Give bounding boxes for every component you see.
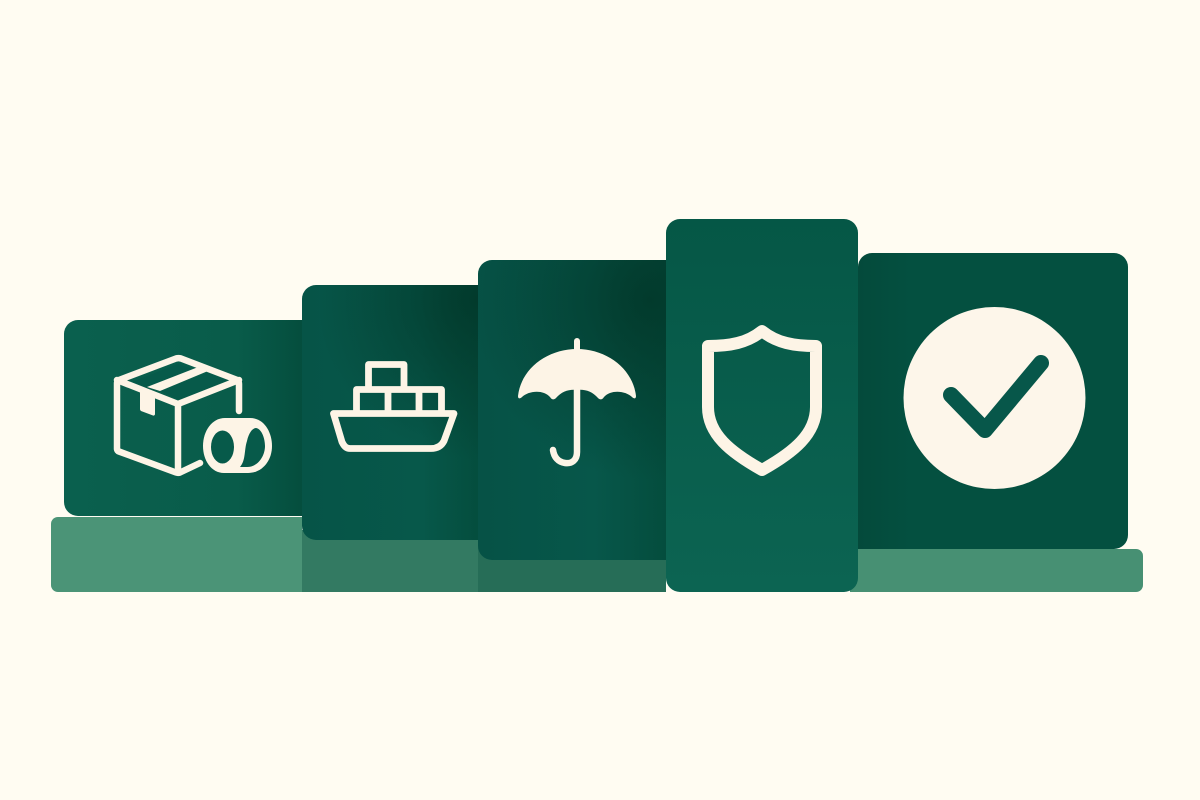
panel: shipping card	[302, 285, 486, 540]
icon: check mark in circle	[904, 307, 1086, 489]
icon: umbrella	[518, 341, 636, 463]
panel: approval card	[858, 253, 1128, 549]
base platform	[51, 517, 1143, 592]
panel: insurance card	[478, 260, 672, 560]
panel: packing card	[64, 320, 310, 516]
icon: parcel box and tape roll	[117, 358, 272, 473]
icon: shield	[708, 331, 816, 470]
panel: protection card	[666, 219, 858, 592]
icon: container ship	[334, 364, 454, 448]
